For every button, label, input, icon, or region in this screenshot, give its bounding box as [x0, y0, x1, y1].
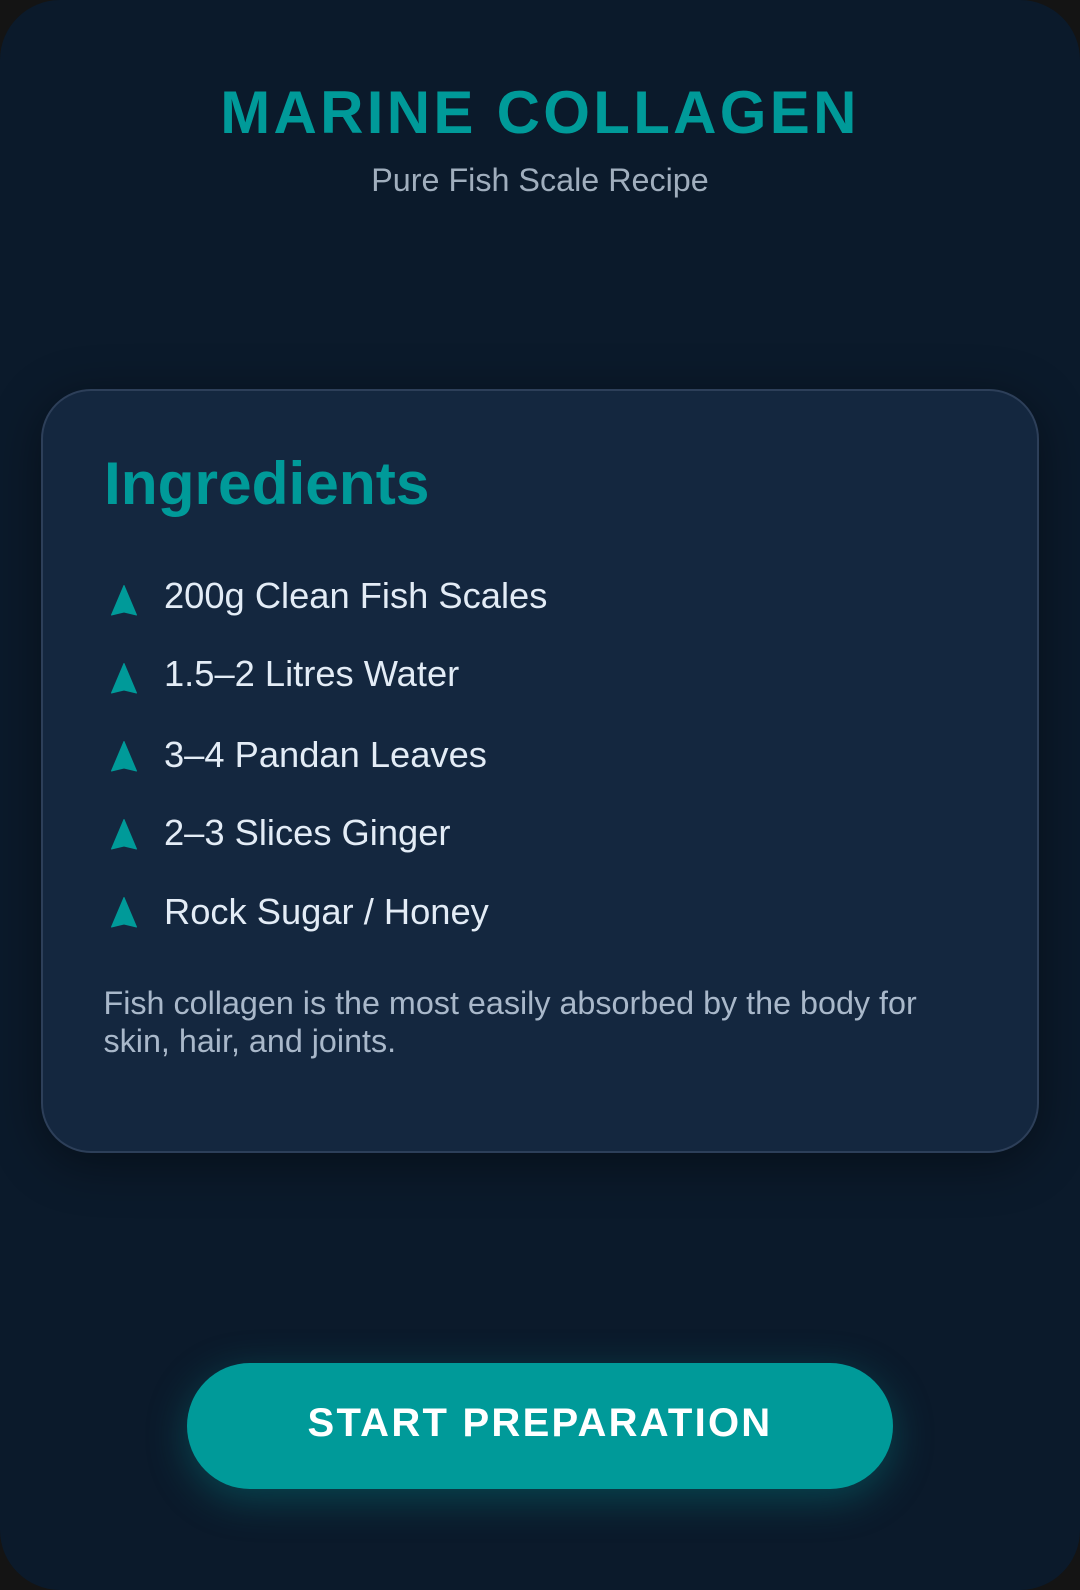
subtitle: Pure Fish Scale Recipe — [371, 162, 709, 198]
title: MARINE COLLAGEN — [220, 79, 860, 146]
description text: Fish collagen is the most easily absorbed by the body for — [104, 985, 917, 1021]
description text — [104, 985, 917, 1059]
ingredient 1: 200g Clean Fish Scales — [164, 575, 547, 616]
button: start preparation — [187, 1363, 893, 1489]
icon: arrow 2 — [111, 663, 137, 694]
icon: arrow 5 — [111, 897, 137, 928]
icon: arrow 4 — [111, 819, 137, 850]
button label: START PREPARATION — [308, 1400, 772, 1444]
heading: ingredients: Ingredients — [104, 449, 429, 517]
ingredient 2: 1.5–2 Litres Water — [164, 653, 459, 694]
ingredient 4: 2–3 Slices Ginger — [164, 812, 450, 853]
panel: ingredients — [41, 389, 1039, 1153]
description text: skin, hair, and joints. — [104, 1023, 396, 1059]
ingredient 3: 3–4 Pandan Leaves — [164, 734, 487, 775]
icon: arrow 3 — [111, 741, 137, 772]
ingredient 5: Rock Sugar / Honey — [164, 891, 489, 932]
icon: arrow 1 — [111, 585, 137, 616]
